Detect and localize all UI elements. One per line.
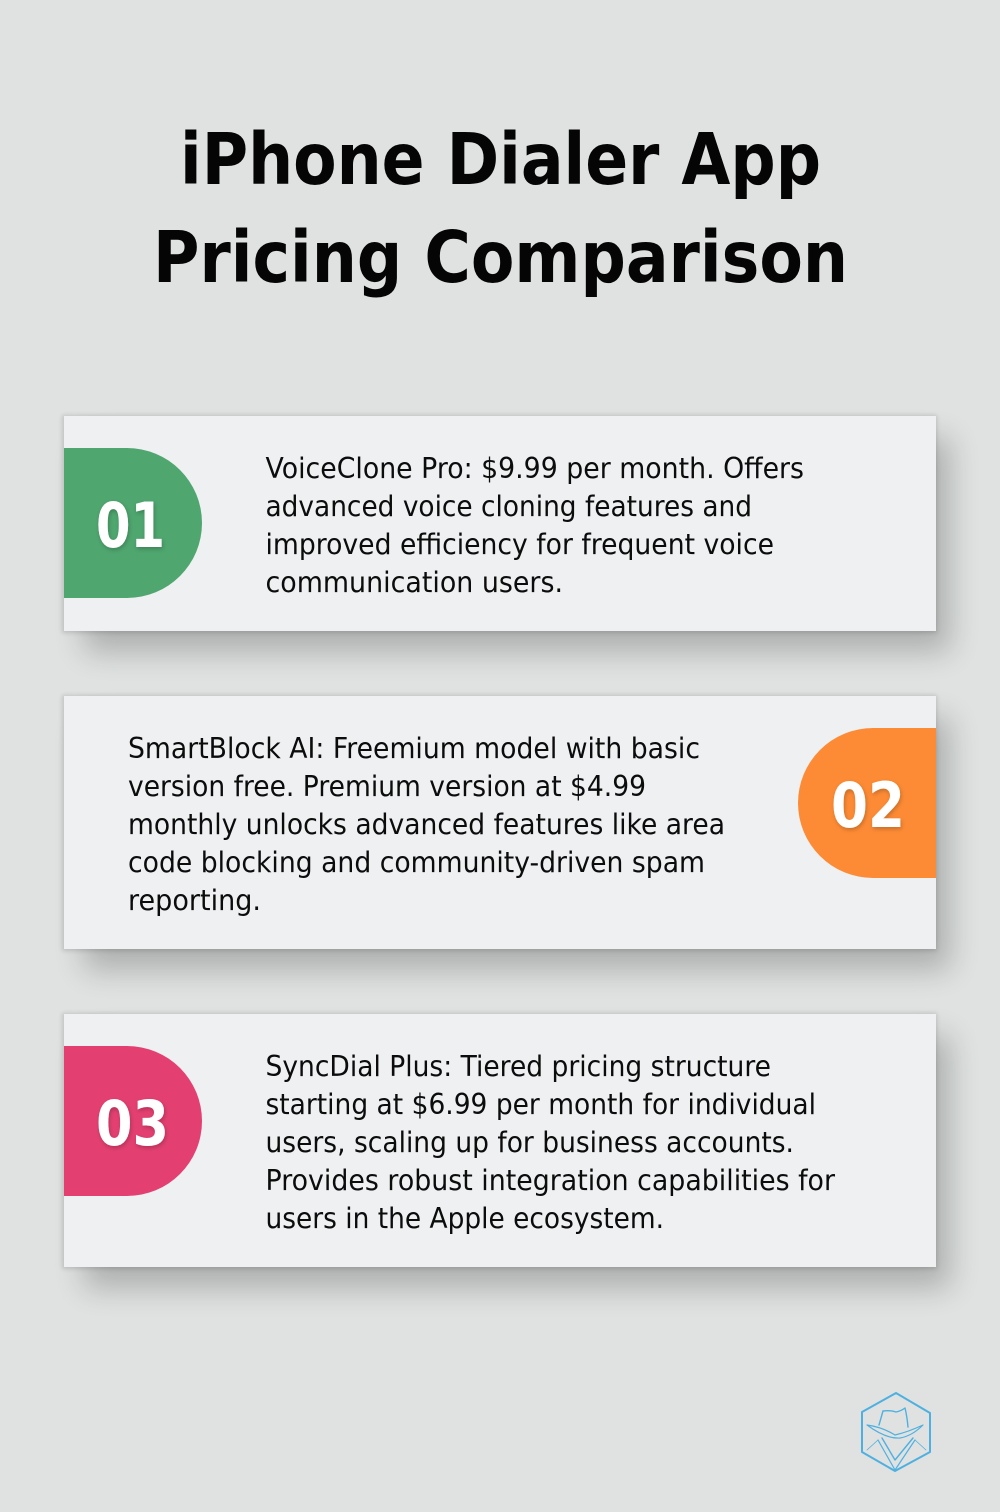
badge: 02 bbox=[798, 728, 936, 878]
text: VoiceClone Pro: communication users. bbox=[266, 566, 563, 599]
text: VoiceClone Pro: advanced voice cloning features and bbox=[266, 490, 752, 523]
badge: 02: 02 bbox=[831, 769, 905, 842]
icon: hexagon spy logo bbox=[862, 1393, 930, 1471]
badge: 01 bbox=[64, 448, 202, 598]
title bbox=[153, 118, 848, 299]
text: SyncDial Plus: starting at $6.99 per month for individual bbox=[266, 1088, 816, 1121]
panel: VoiceClone Pro bbox=[62, 415, 950, 652]
text: SmartBlock AI: reporting. bbox=[128, 884, 261, 917]
badge: 03 bbox=[64, 1046, 202, 1196]
text: VoiceClone Pro: VoiceClone Pro: $9.99 per month. Offers bbox=[266, 452, 804, 485]
text: SmartBlock AI: SmartBlock AI: Freemium model with basic bbox=[128, 732, 700, 765]
text: VoiceClone Pro: improved efficiency for frequent voice bbox=[266, 528, 774, 561]
text: VoiceClone Pro bbox=[266, 452, 804, 599]
title: iPhone Dialer App bbox=[180, 118, 821, 201]
panel: SyncDial Plus bbox=[62, 1013, 950, 1288]
text: SmartBlock AI bbox=[128, 732, 725, 917]
title: Pricing Comparison bbox=[153, 216, 848, 299]
badge: 01: 01 bbox=[96, 489, 165, 562]
text: SyncDial Plus: SyncDial Plus: Tiered pricing structure bbox=[266, 1050, 771, 1083]
text: SyncDial Plus: users in the Apple ecosystem. bbox=[266, 1202, 664, 1235]
text: SmartBlock AI: version free. Premium version at $4.99 bbox=[128, 770, 646, 803]
text: SyncDial Plus: Provides robust integration capabilities for bbox=[266, 1164, 835, 1197]
text: SyncDial Plus bbox=[266, 1050, 835, 1235]
badge: 03: 03 bbox=[96, 1087, 169, 1160]
text: SyncDial Plus: users, scaling up for business accounts. bbox=[266, 1126, 794, 1159]
text: SmartBlock AI: code blocking and community-driven spam bbox=[128, 846, 705, 879]
panel: SmartBlock AI bbox=[62, 695, 950, 970]
text: SmartBlock AI: monthly unlocks advanced features like area bbox=[128, 808, 725, 841]
